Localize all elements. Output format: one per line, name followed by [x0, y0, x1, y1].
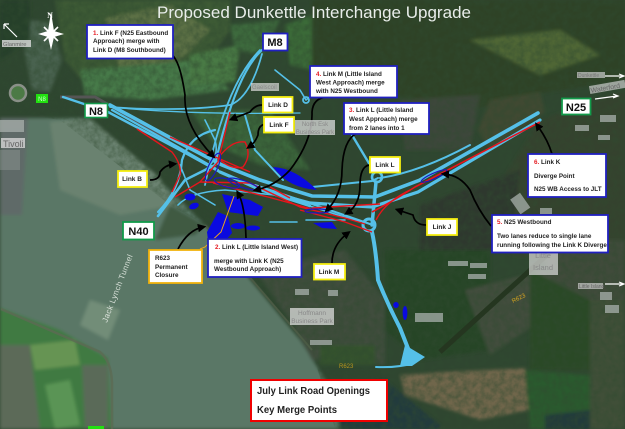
callout 2: Link L merge with Link K: Link L (Little Island West)	[220, 244, 298, 251]
road label: N25	[562, 98, 590, 114]
legend box: July Link Road Openings	[251, 380, 387, 421]
industrial centre	[385, 250, 490, 360]
south-west farmland	[0, 308, 112, 429]
link label: Link B	[118, 171, 147, 187]
callout: R623 permanent closure: R623	[155, 255, 171, 262]
place label: Hoffmann Business Park: Business Park	[291, 318, 334, 325]
callout 4: Link M merge	[310, 66, 397, 98]
callout 3: Link L lane merge	[344, 103, 429, 134]
callout 5: N25 Westbound	[492, 215, 608, 252]
road label: N8	[85, 104, 108, 118]
callout 5: N25 Westbound: 5.	[497, 219, 503, 226]
north wooded residential	[312, 0, 625, 110]
title: Proposed Dunkettle Interchange Upgrade	[157, 4, 471, 22]
callout 2: Link L merge with Link K: 2.	[215, 244, 221, 251]
place label: Glanmire: Glanmire	[3, 42, 27, 48]
road label: N8: N8	[89, 106, 103, 118]
callout 2: Link L merge with Link K: merge with Link K (N25	[214, 258, 284, 265]
east urban	[480, 90, 625, 270]
place labels on map	[1, 40, 625, 370]
callout 1: Link F merge: 1.	[93, 30, 99, 37]
callout 1: Link F merge	[87, 25, 173, 58]
road label: R623 south: R623	[339, 364, 354, 370]
callout 3: Link L lane merge: Link L (Little Island	[354, 107, 413, 114]
green marker south	[88, 426, 104, 429]
callout 3: Link L lane merge: 3.	[349, 107, 355, 114]
icon: compass rose	[38, 11, 64, 50]
callout 4: Link M merge: 4.	[316, 71, 322, 78]
pale buildings	[0, 115, 619, 345]
callout 2: Link L merge with Link K	[208, 239, 302, 277]
estuary water	[0, 118, 345, 429]
place label: Glanmire	[2, 40, 31, 48]
place label: North Esk Business Park: North Esk	[302, 122, 329, 128]
bottom water	[335, 380, 440, 429]
place label: Little Island: Little	[535, 251, 551, 260]
road label: R623 east: R623	[511, 293, 527, 305]
place label: Gaelscoil	[251, 83, 279, 91]
callout 5: N25 Westbound: running following the Link K Diverge	[497, 242, 607, 249]
road label: N25: N25	[566, 102, 586, 114]
callout 6: Link K diverge: Link K	[539, 159, 561, 166]
place label: Little Island	[529, 250, 558, 275]
place label: Hoffmann Business Park	[290, 308, 334, 325]
road label: M8	[263, 34, 288, 50]
place label: Little Island east: Little Island	[579, 284, 605, 290]
callout 2: Link L merge with Link K: Westbound Approach)	[214, 266, 281, 273]
callout 6: Link K diverge: N25 WB Access to JLT	[534, 186, 602, 193]
green N8 marker: N8	[38, 97, 46, 103]
Tivoli industrial shore	[0, 118, 28, 215]
place label: North Esk Business Park: Business Park	[296, 130, 335, 136]
top left fields	[55, 0, 230, 95]
callout 4: Link M merge: West Approach) merge	[316, 80, 385, 86]
callout: R623 permanent closure: Closure	[155, 272, 179, 279]
place label: Jack Lynch Tunnel: Jack Lynch Tunnel	[100, 253, 135, 324]
link label: Link F: Link F	[269, 122, 289, 129]
place label: Dunkettle	[577, 72, 605, 79]
dark blue attenuation ponds	[184, 167, 407, 320]
black callout arrows	[150, 54, 552, 263]
Glanmire lagoon	[24, 20, 62, 92]
place label: Waterford	[589, 80, 625, 95]
callout 3: Link L lane merge: from 2 lanes into 1	[349, 125, 405, 132]
callout 6: Link K diverge: 6.	[534, 159, 540, 166]
callout 5: N25 Westbound: Two lanes reduce to single lane	[497, 233, 592, 240]
callout 1: Link F merge: Link D (M8 Southbound)	[93, 47, 166, 54]
callout 6: Link K diverge	[528, 154, 606, 197]
legend box: July Link Road Openings: July Link Road Openings	[257, 386, 370, 397]
callout 6: Link K diverge: Diverge Point	[534, 173, 575, 180]
place label: Hoffmann Business Park: Hoffmann	[298, 310, 326, 317]
place label: Gaelscoil: Gaelscoil	[252, 85, 277, 91]
brown field	[400, 368, 530, 420]
road label: N40: N40	[128, 226, 149, 238]
icon: compass rose: N	[47, 11, 53, 20]
light blue proposed road network	[63, 50, 540, 367]
callout 4: Link M merge: with N25 Westbound	[315, 88, 378, 95]
dark blue merge ellipses	[203, 152, 448, 213]
link label: Link M	[314, 264, 345, 280]
place label: Tivoli: Tivoli	[3, 139, 24, 149]
callout: R623 permanent closure	[149, 250, 202, 283]
callout 5: N25 Westbound: N25 Westbound	[502, 219, 552, 226]
link label: Link J	[427, 219, 457, 235]
link label: Link B: Link B	[122, 176, 142, 183]
callout 1: Link F merge: Link F (N25 Eastbound	[98, 30, 168, 37]
orange R623 closure line	[200, 196, 234, 249]
interchange land	[155, 205, 205, 240]
red link lines	[137, 112, 540, 232]
road label: N40	[123, 222, 154, 240]
directional arrows	[4, 24, 624, 286]
place label: North Esk Business Park	[295, 120, 335, 136]
link label: Link L	[370, 157, 400, 172]
junction fan at south end	[400, 345, 425, 366]
callout 3: Link L lane merge: West Approach) merge	[349, 116, 418, 123]
road label: M8: M8	[267, 37, 283, 49]
callout 1: Link F merge: Approach) merge with	[93, 38, 160, 45]
legend box: July Link Road Openings: Key Merge Points	[257, 405, 337, 416]
link label: Link M: Link M	[319, 269, 339, 276]
link label: Link F	[264, 117, 294, 132]
green N8 marker	[36, 94, 48, 103]
Hoffmann business park	[255, 250, 385, 365]
place label: Dunkettle: Dunkettle	[578, 73, 599, 79]
callout: R623 permanent closure: Permanent	[155, 264, 188, 271]
place label: Waterford: Waterford	[590, 83, 621, 95]
yard	[400, 95, 480, 150]
link label: Link D: Link D	[268, 102, 288, 109]
link label: Link J: Link J	[433, 224, 452, 231]
reed bed	[478, 92, 545, 150]
callout 4: Link M merge: Link M (Little Island	[321, 71, 382, 78]
link label: Link L: Link L	[375, 162, 395, 169]
link label: Link D	[263, 97, 292, 112]
place label: Little Island: Island	[533, 263, 553, 272]
